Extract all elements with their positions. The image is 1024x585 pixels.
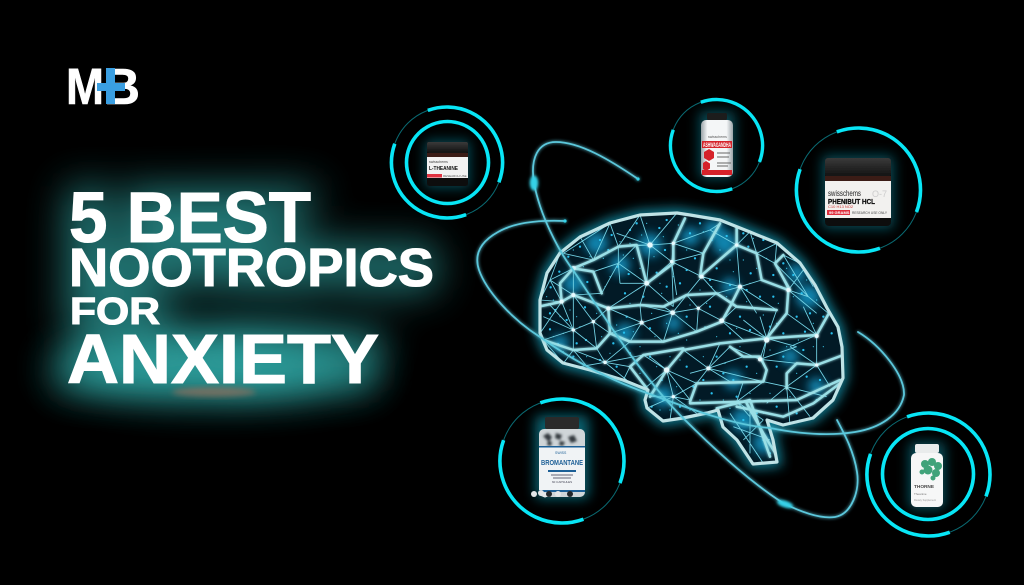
product: thorne bottle: Dietary Supplement <box>914 499 936 502</box>
logo: M+B: B <box>104 58 140 115</box>
product: bromantane bottle <box>531 415 589 499</box>
product: L-theanine jar: RESEARCH USE <box>443 174 467 178</box>
arc: upper orbit <box>533 142 858 517</box>
product: phenibut jar <box>822 155 894 229</box>
icon: blue plus <box>97 68 125 104</box>
arc: lower orbit <box>477 221 904 434</box>
blue particle dots <box>550 220 832 453</box>
ring: phenibut <box>779 111 938 269</box>
ring: ashwagandha <box>658 87 775 204</box>
title: ANXIETY <box>67 320 379 398</box>
product: phenibut jar: C10 H13 NO2 <box>828 204 854 209</box>
title glow <box>50 179 434 398</box>
product: phenibut jar: PHENIBUT HCL <box>828 197 875 206</box>
product: phenibut jar: swisschems <box>828 189 861 198</box>
product: thorne bottle: Theanine <box>914 492 927 496</box>
product: phenibut jar: 99 GRAMS <box>829 210 850 215</box>
orbit arcs <box>477 142 904 517</box>
ring: L-theanine <box>376 91 518 234</box>
product: ashwagandha bottle: swisschems <box>708 135 727 139</box>
product: thorne bottle: THORNE <box>914 484 934 489</box>
product: phenibut jar: RESEARCH USE ONLY <box>852 210 887 215</box>
product: ashwagandha bottle: ASHWAGANDHA <box>703 143 731 149</box>
product: L-theanine jar: swisschems <box>429 160 448 164</box>
product: ashwagandha bottle <box>699 111 735 179</box>
product: L-theanine jar <box>425 140 470 188</box>
title: NOOTROPICS <box>69 238 434 298</box>
product: bromantane bottle: BROMANTANE <box>541 460 583 467</box>
brain illustration <box>540 213 843 464</box>
product: thorne bottle <box>909 442 945 509</box>
blue haze inside brain <box>551 220 825 454</box>
product: phenibut jar: O-7 <box>872 189 887 199</box>
glowing nodes <box>560 242 819 398</box>
title glow: 5 BEST <box>69 179 311 258</box>
product: L-theanine jar: L-THEANINE <box>429 166 459 172</box>
logo: M+B: M <box>66 58 104 115</box>
title: 5 BEST <box>69 179 311 258</box>
title glow: ANXIETY <box>67 320 379 398</box>
title <box>67 179 434 398</box>
title glow: NOOTROPICS <box>69 238 434 298</box>
arc glow nodes <box>530 176 793 509</box>
thick brain folds <box>542 218 843 457</box>
ring: bromantane <box>483 382 641 540</box>
product: bromantane bottle: 60 CAPSULES <box>552 480 572 484</box>
title glow: FOR <box>70 291 160 333</box>
logo: M+B <box>66 58 140 115</box>
product: bromantane bottle: SWISS <box>555 451 567 455</box>
title: FOR <box>70 291 160 333</box>
ring: thorne <box>850 396 1007 553</box>
triangular mesh lines <box>540 213 830 463</box>
